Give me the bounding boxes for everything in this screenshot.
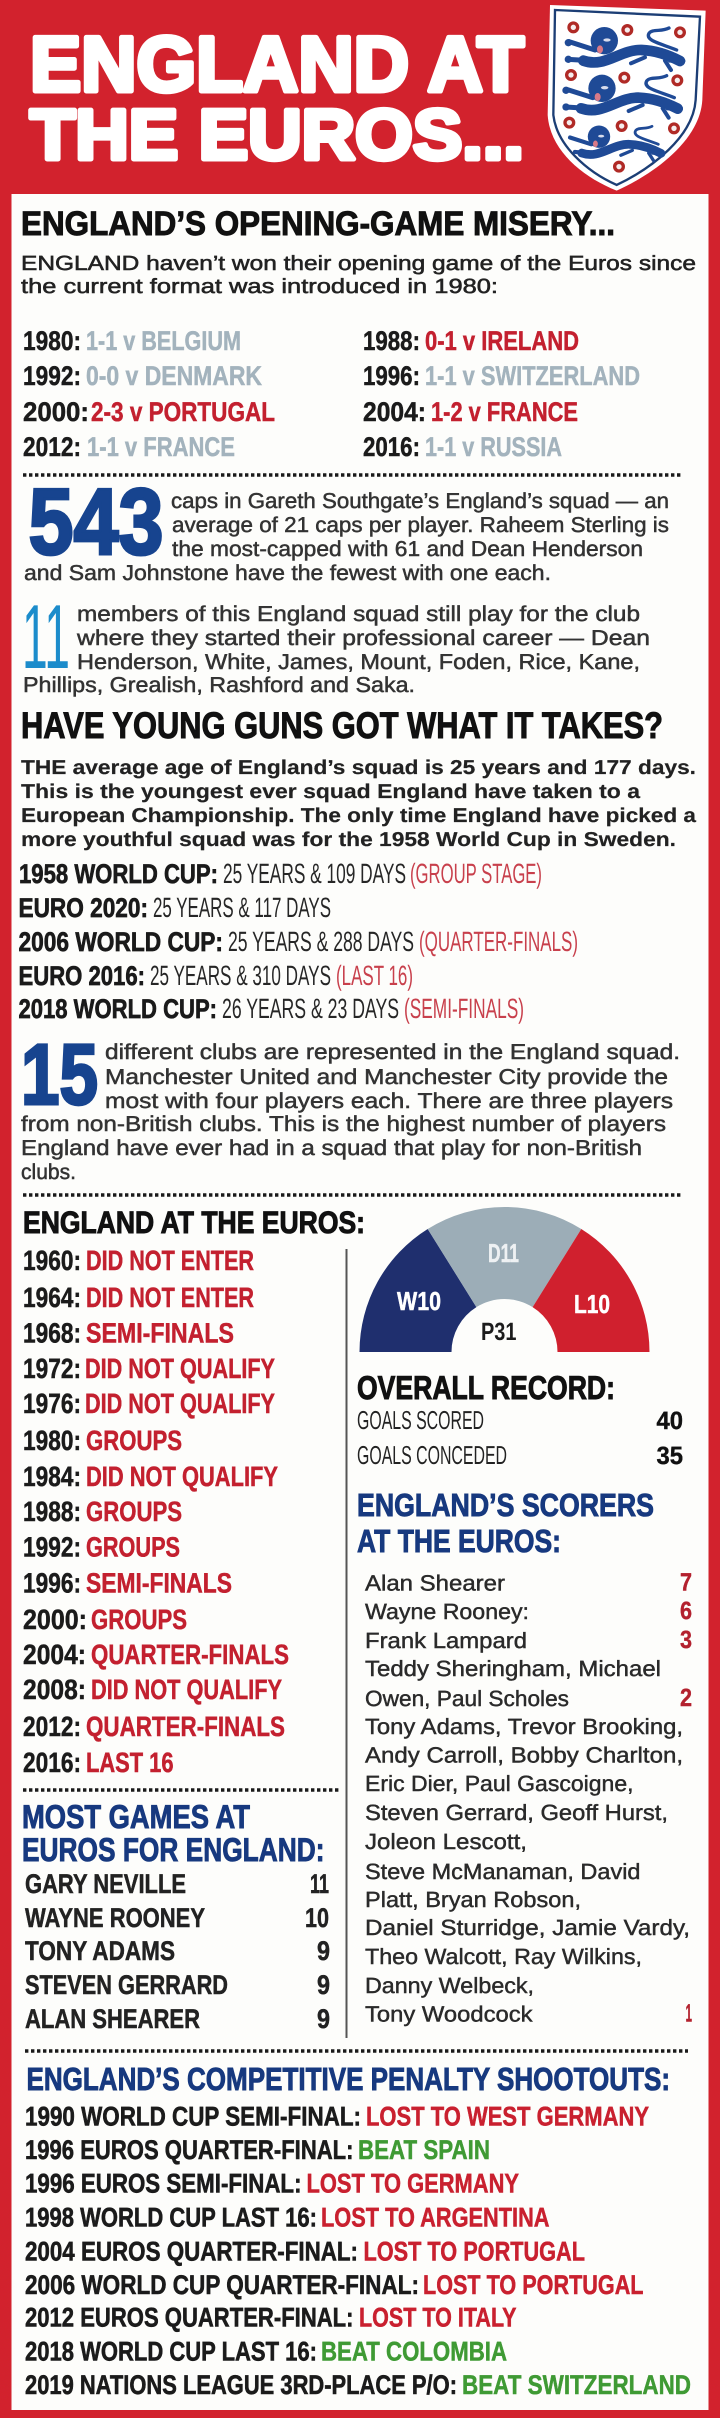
result 2004: 2004: — [363, 397, 426, 427]
age Euro 2020 — [18, 892, 331, 923]
history 1972: DID NOT QUALIFY — [85, 1353, 275, 1384]
age 2006 World Cup: 25 YEARS & 288 DAYS — [228, 926, 414, 957]
result 1980 — [23, 326, 241, 356]
heading: scorers: AT THE EUROS: — [357, 1523, 561, 1559]
shootout 1996 semi-final: LOST TO GERMANY — [306, 2168, 519, 2198]
text block: clubs: clubs. — [21, 1160, 76, 1184]
list: scorers: Tony Adams, Trevor Brooking, — [365, 1714, 683, 1739]
age Euro 2016 — [18, 960, 413, 991]
list: scorers: Andy Carroll, Bobby Charlton, — [365, 1742, 683, 1768]
age 2018 World Cup: (SEMI-FINALS) — [404, 993, 524, 1024]
table: most games: 9 — [317, 1936, 330, 1966]
history 1968: 1968: — [23, 1318, 81, 1348]
history 1996 — [23, 1568, 232, 1598]
history 1960: DID NOT ENTER — [86, 1245, 254, 1276]
list: scorers: Tony Woodcock — [365, 2002, 534, 2026]
list: scorers — [365, 1568, 692, 2028]
shootout 1996 quarter-final: 1996 EUROS QUARTER-FINAL: — [25, 2135, 354, 2165]
result 2012 — [23, 432, 235, 462]
list: opening game results — [23, 326, 640, 462]
result 1980: 1-1 v BELGIUM — [86, 326, 241, 356]
list: scorers: Joleon Lescott, — [365, 1829, 527, 1854]
text block: caps: the most-capped with 61 and Dean Henderson — [172, 537, 643, 561]
history 1992: GROUPS — [86, 1532, 180, 1562]
age Euro 2020: EURO 2020: — [18, 893, 148, 923]
table: most games: 11 — [310, 1869, 329, 1899]
history 2000: GROUPS — [91, 1604, 187, 1635]
history 1964: 1964: — [23, 1282, 81, 1313]
shootout 1996 semi-final — [25, 2168, 519, 2198]
shootout 1996 quarter-final: BEAT SPAIN — [358, 2135, 490, 2165]
list: scorers: Frank Lampard — [365, 1628, 527, 1653]
history 1980: GROUPS — [86, 1425, 182, 1456]
segment: wins — [359, 1229, 476, 1352]
table: most games: WAYNE ROONEY — [25, 1903, 205, 1933]
table: most games: ALAN SHEARER — [25, 2004, 200, 2034]
result 1992: 0-0 v DENMARK — [86, 361, 262, 391]
list: scorers: Steven Gerrard, Geoff Hurst, — [365, 1800, 668, 1825]
table: most games: 10 — [305, 1903, 329, 1933]
text block: caps: caps in Gareth Southgate’s England’s squad — an — [171, 489, 669, 513]
age 1958 World Cup — [19, 858, 542, 889]
chart: overall record semicircle — [359, 1207, 650, 1352]
result 2012: 2012: — [23, 432, 81, 462]
shootout 1996 semi-final: 1996 EUROS SEMI-FINAL: — [25, 2168, 302, 2198]
list: squad ages — [18, 858, 578, 1024]
text block: club members: members of this England squad still play for the club — [77, 602, 640, 626]
history 1968 — [23, 1318, 234, 1348]
history 2016: LAST 16 — [86, 1747, 174, 1778]
heading: most games — [22, 1798, 324, 1868]
text block: clubs: Manchester United and Manchester City provide the — [105, 1065, 668, 1089]
history 2008: 2008: — [23, 1674, 86, 1705]
shootout 2006: LOST TO PORTUGAL — [423, 2270, 644, 2300]
shootout 1990: 1990 WORLD CUP SEMI-FINAL: — [25, 2102, 361, 2132]
text block: club members — [23, 602, 650, 697]
result 1992: 1992: — [23, 361, 81, 391]
result 1996: 1-1 v SWITZERLAND — [425, 361, 640, 391]
history 1968: SEMI-FINALS — [86, 1318, 234, 1348]
history 1960 — [23, 1245, 254, 1276]
history 2016: 2016: — [23, 1747, 81, 1778]
result 1988: 0-1 v IRELAND — [425, 326, 579, 356]
text block: caps: average of 21 caps per player. Raheem Sterling is — [172, 513, 669, 537]
chart: overall record semicircle: P31 — [481, 1318, 517, 1346]
history 1996: SEMI-FINALS — [86, 1568, 232, 1598]
history 2004: QUARTER-FINALS — [91, 1639, 289, 1670]
list: scorers: Steve McManaman, David — [365, 1859, 640, 1884]
text block: clubs — [21, 1040, 680, 1184]
text: 1 — [686, 2000, 692, 2028]
age 2006 World Cup — [18, 926, 578, 957]
result 1992 — [23, 361, 262, 391]
shootout 2012: 2012 EUROS QUARTER-FINAL: — [25, 2302, 354, 2332]
list: scorers: 3 — [680, 1626, 692, 1654]
history 1980: 1980: — [23, 1425, 81, 1456]
text block: club members: Henderson, White, James, Mount, Foden, Rice, Kane, — [77, 650, 640, 674]
history 2004 — [23, 1639, 289, 1670]
age 2018 World Cup — [18, 993, 524, 1024]
age Euro 2016: 25 YEARS & 310 DAYS — [150, 960, 331, 991]
list: scorers: Theo Walcott, Ray Wilkins, — [365, 1944, 642, 1969]
text block: caps — [24, 489, 669, 585]
heading: most games: MOST GAMES AT — [22, 1798, 250, 1835]
heading: England at the Euros: ENGLAND AT THE EUROS: — [23, 1205, 365, 1240]
history 1964: DID NOT ENTER — [86, 1282, 254, 1313]
table: most games: STEVEN GERRARD — [25, 1970, 228, 2000]
history 1988: GROUPS — [86, 1496, 182, 1527]
history 2000: 2000: — [23, 1604, 87, 1635]
history 1988: 1988: — [23, 1496, 81, 1527]
text block: clubs: different clubs are represented in the England squad. — [105, 1040, 680, 1064]
shootout 2004: 2004 EUROS QUARTER-FINAL: — [25, 2236, 358, 2266]
text block: clubs: England have ever had in a squad that play for non-British — [21, 1136, 642, 1160]
shootout 2006: 2006 WORLD CUP QUARTER-FINAL: — [25, 2270, 419, 2300]
text block: opening-game intro: ENGLAND haven’t won their opening game of the Euros since — [21, 252, 696, 275]
title: ENGLAND AT — [30, 20, 524, 108]
list: scorers: Owen, Paul Scholes — [365, 1686, 569, 1711]
list: scorers: Eric Dier, Paul Gascoigne, — [365, 1771, 634, 1796]
history 1988 — [23, 1496, 182, 1527]
result 2004: 1-2 v FRANCE — [431, 397, 578, 427]
history 1992 — [23, 1532, 180, 1562]
list: scorers: 6 — [680, 1597, 692, 1625]
text block: squad average age: European Championship. The only time England have picked a — [21, 805, 697, 827]
history 1984: DID NOT QUALIFY — [86, 1461, 278, 1492]
list: scorers: Danny Welbeck, — [365, 1973, 534, 1998]
age 1958 World Cup: 1958 WORLD CUP: — [19, 859, 218, 889]
history 1984: 1984: — [23, 1461, 81, 1492]
list: scorers: Daniel Sturridge, Jamie Vardy, — [365, 1915, 690, 1940]
list: scorers: Platt, Bryan Robson, — [365, 1887, 581, 1912]
history 1976 — [23, 1388, 275, 1419]
shootout 2018: 2018 WORLD CUP LAST 16: — [25, 2336, 317, 2366]
text block: caps: and Sam Johnstone have the fewest with one each. — [24, 561, 551, 585]
age Euro 2020: 25 YEARS & 117 DAYS — [153, 892, 331, 923]
text block: club members: Phillips, Grealish, Rashford and Saka. — [23, 673, 415, 697]
history 1992: 1992: — [23, 1532, 81, 1562]
shootout 1998: 1998 WORLD CUP LAST 16: — [25, 2202, 317, 2232]
stat: 15 clubs number: 15 — [21, 1027, 98, 1123]
history 1972 — [23, 1353, 275, 1384]
heading: scorers: ENGLAND’S SCORERS — [357, 1487, 654, 1523]
table: most games: 9 — [317, 2004, 330, 2034]
list: Euros history — [23, 1245, 289, 1778]
table: most games: 9 — [317, 1970, 330, 2000]
result 2016 — [363, 432, 562, 462]
shootout 1990 — [25, 2102, 649, 2132]
history 1996: 1996: — [23, 1568, 81, 1598]
history 1976: DID NOT QUALIFY — [85, 1388, 275, 1419]
age 1958 World Cup: (GROUP STAGE) — [410, 858, 542, 889]
shootout 1998: LOST TO ARGENTINA — [321, 2202, 550, 2232]
table: most games — [25, 1869, 330, 2034]
text block: opening-game intro — [21, 252, 696, 298]
title: THE EUROS... — [30, 96, 524, 175]
icon: three lions badge — [548, 5, 706, 191]
shootout 2018: BEAT COLOMBIA — [321, 2336, 507, 2366]
text block: opening-game intro: the current format was introduced in 1980: — [21, 275, 498, 298]
age 2006 World Cup: (QUARTER-FINALS) — [419, 926, 578, 957]
result 2004 — [363, 397, 578, 427]
history 1960: 1960: — [23, 1245, 81, 1276]
history 1976: 1976: — [23, 1388, 81, 1419]
age 2018 World Cup: 2018 WORLD CUP: — [18, 994, 217, 1024]
result 1996: 1996: — [363, 361, 420, 391]
text block: squad average age: This is the youngest ever squad England have taken to a — [21, 781, 641, 803]
shootout 1990: LOST TO WEST GERMANY — [366, 2102, 649, 2132]
heading: most games: EUROS FOR ENGLAND: — [22, 1831, 324, 1868]
table: most games: GARY NEVILLE — [25, 1869, 186, 1899]
history 2012 — [23, 1711, 285, 1742]
table: goals record: GOALS SCORED — [357, 1405, 484, 1435]
title — [30, 20, 524, 175]
chart: overall record semicircle: D11 — [488, 1238, 519, 1268]
list: scorers: 7 — [680, 1568, 692, 1596]
list: scorers: 2 — [680, 1684, 692, 1712]
text block: squad average age: THE average age of England’s squad is 25 years and 177 days. — [21, 757, 696, 779]
shootout 2004: LOST TO PORTUGAL — [364, 2236, 585, 2266]
text block: club members: where they started their professional career — Dean — [76, 626, 650, 650]
history 1964 — [23, 1282, 254, 1313]
table: goals record: 35 — [656, 1442, 683, 1470]
result 2000 — [23, 397, 275, 427]
age 1958 World Cup: 25 YEARS & 109 DAYS — [223, 858, 406, 889]
history 2000 — [23, 1604, 187, 1635]
age 2018 World Cup: 26 YEARS & 23 DAYS — [222, 993, 399, 1024]
result 2016: 1-1 v RUSSIA — [425, 432, 562, 462]
history 2012: QUARTER-FINALS — [86, 1711, 285, 1742]
shootout 2019: 2019 NATIONS LEAGUE 3RD-PLACE P/O: — [25, 2370, 457, 2400]
text block: clubs: from non-British clubs. This is the highest number of players — [21, 1112, 666, 1136]
history 1984 — [23, 1461, 278, 1492]
chart: overall record semicircle: W10 — [397, 1286, 441, 1316]
result 1988: 1988: — [363, 326, 420, 356]
list: scorers: Alan Shearer — [365, 1570, 505, 1596]
heading: scorers — [357, 1487, 654, 1559]
list: scorers: Teddy Sheringham, Michael — [365, 1656, 661, 1681]
heading: opening-game misery: ENGLAND’S OPENING-GAME MISERY... — [21, 205, 615, 243]
history 1972: 1972: — [23, 1353, 81, 1384]
shootout 1998 — [25, 2202, 550, 2232]
result 2012: 1-1 v FRANCE — [87, 432, 235, 462]
table: goals record — [357, 1405, 683, 1470]
history 2004: 2004: — [23, 1639, 86, 1670]
age 2006 World Cup: 2006 WORLD CUP: — [18, 927, 223, 957]
list: scorers: Wayne Rooney: — [365, 1599, 529, 1624]
result 1996 — [363, 361, 640, 391]
text block: clubs: most with four players each. There are three players — [105, 1089, 673, 1113]
history 2008 — [23, 1674, 282, 1705]
text block: squad average age: more youthful squad was for the 1958 World Cup in Sweden. — [21, 829, 676, 851]
history 1980 — [23, 1425, 182, 1456]
result 2000: 2-3 v PORTUGAL — [91, 397, 275, 427]
result 1988 — [363, 326, 579, 356]
history 2016 — [23, 1747, 174, 1778]
table: goals record: GOALS CONCEDED — [357, 1440, 507, 1470]
history 2012: 2012: — [23, 1711, 81, 1742]
table: goals record: 40 — [656, 1407, 683, 1435]
result 1980: 1980: — [23, 326, 81, 356]
result 2000: 2000: — [23, 397, 89, 427]
shootout 2012: LOST TO ITALY — [359, 2302, 516, 2332]
heading: overall record: OVERALL RECORD: — [357, 1369, 615, 1406]
stat: 11 members number: 11 — [22, 587, 70, 688]
age Euro 2016: EURO 2016: — [18, 961, 145, 991]
segment: losses — [533, 1229, 650, 1352]
result 2016: 2016: — [363, 432, 420, 462]
list: penalty shootouts — [25, 2102, 691, 2400]
chart: overall record semicircle: L10 — [574, 1289, 610, 1319]
text block: squad average age — [21, 757, 697, 851]
segment: draws — [428, 1207, 581, 1307]
stat: 543 caps number: 543 — [28, 469, 164, 574]
history 2008: DID NOT QUALIFY — [91, 1674, 282, 1705]
age Euro 2016: (LAST 16) — [336, 960, 413, 991]
table: most games: TONY ADAMS — [25, 1936, 175, 1966]
